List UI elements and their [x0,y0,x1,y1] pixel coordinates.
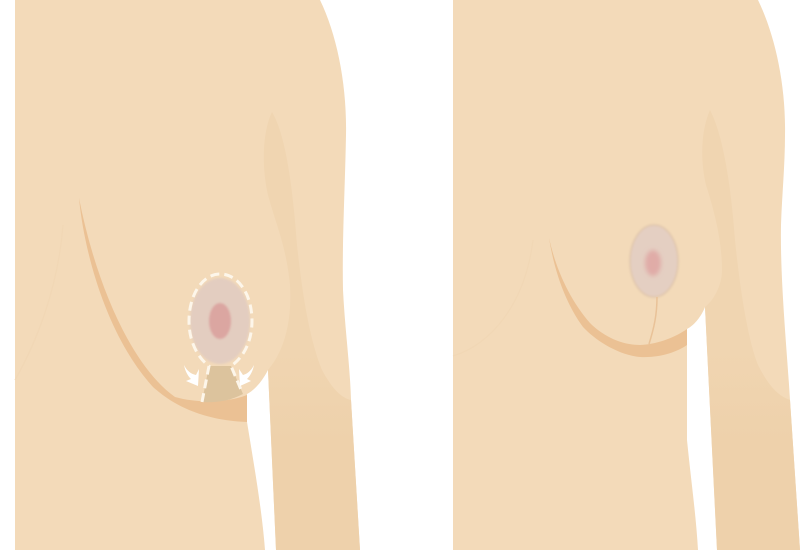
chest crease line: after [453,240,533,356]
areola: before [190,278,250,364]
breast fold: before [79,198,247,422]
nipple: after [645,250,661,276]
panel: after [453,0,800,550]
dashed incision outline: before [189,274,252,402]
chest crease line: before [15,225,63,380]
vertical scar: after [649,297,657,344]
arm shading: before [264,112,360,550]
excision wedge: before [202,366,243,402]
arrow: left [184,365,199,386]
panel: before [15,0,360,550]
arm shading: after [702,110,800,550]
breast fold: after [549,238,687,357]
areola: after [630,225,678,297]
torso and arm: after [453,0,800,550]
arrow: right [239,365,254,386]
nipple: before [209,303,231,339]
torso and arm: before [15,0,360,550]
